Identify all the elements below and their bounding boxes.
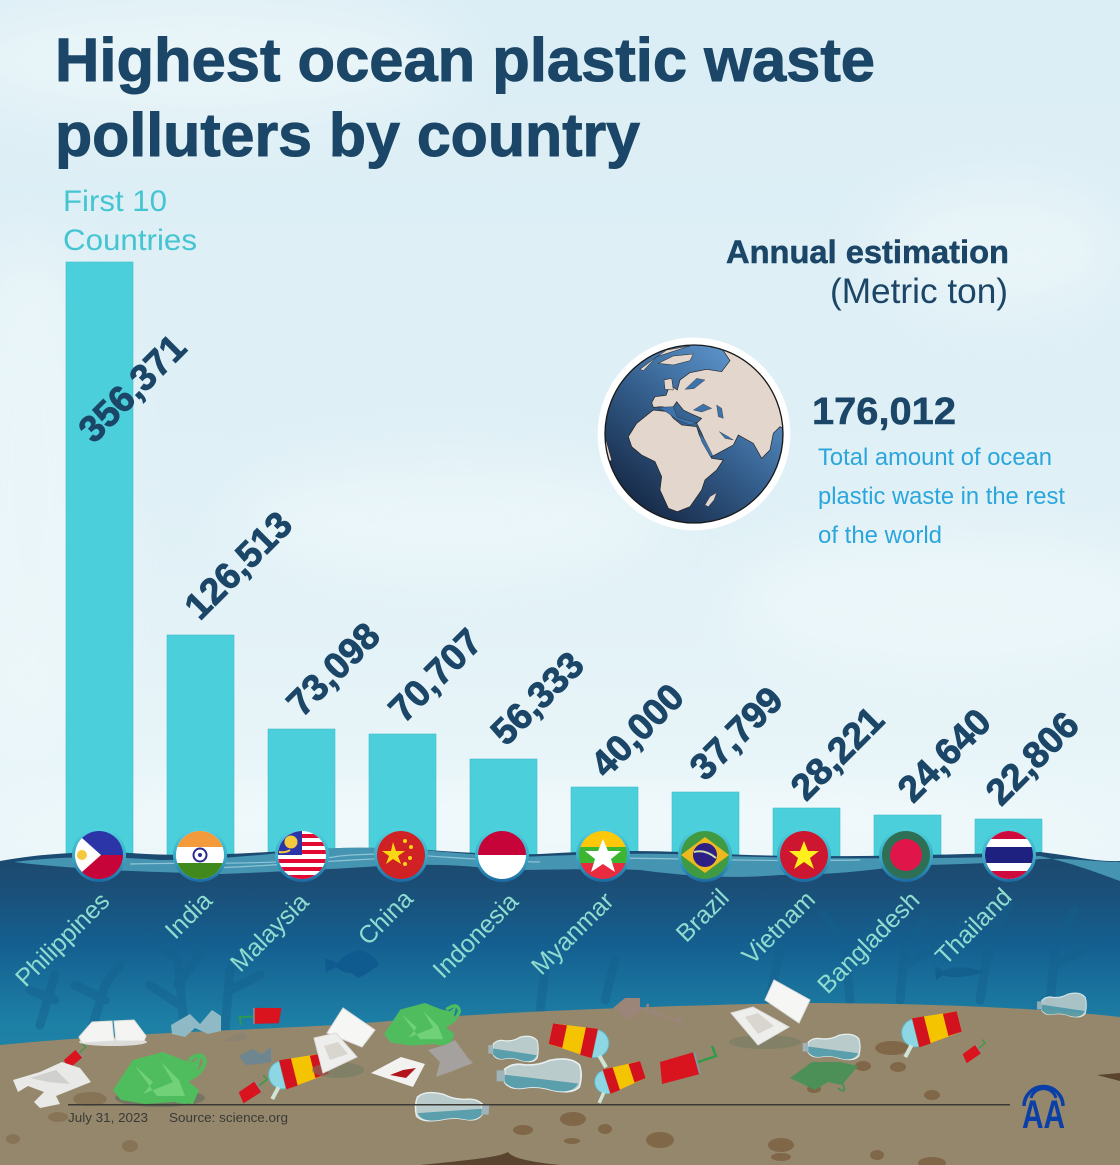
- mediterranean and inland seas: [658, 378, 733, 457]
- green bag centre: [384, 1003, 459, 1046]
- footer date and source: [68, 1110, 288, 1125]
- flag: Myanmar: [576, 828, 630, 882]
- annual estimation heading: [726, 234, 1009, 311]
- value labels: 40,000: [583, 676, 692, 785]
- total description: of the world: [818, 522, 942, 549]
- red cup big: [660, 1046, 716, 1084]
- sky background: [0, 0, 1120, 900]
- country labels: Indonesia: [427, 887, 524, 984]
- footer date and source: Source: science.org: [169, 1110, 288, 1125]
- flag: Vietnam: [777, 828, 831, 882]
- total description: Total amount of ocean: [818, 444, 1052, 471]
- small red cup left: [61, 1043, 91, 1069]
- seabed sand: [0, 1003, 1120, 1165]
- british isles and arctic land: [603, 346, 693, 463]
- bottle far right: [1037, 993, 1086, 1017]
- striped cup right: [897, 1007, 964, 1057]
- africa: [628, 410, 723, 512]
- red cup lower: [236, 1074, 272, 1104]
- fish bone small: [222, 1033, 246, 1042]
- value labels: 70,707: [381, 621, 490, 730]
- flag: Bangladesh: [879, 828, 933, 882]
- madagascar: [705, 493, 717, 507]
- small red cup right: [960, 1039, 990, 1064]
- grey plastic bag: [428, 1040, 473, 1077]
- title: [55, 26, 875, 169]
- AA logo: AA: [1022, 1093, 1065, 1137]
- striped cup upper: [546, 1019, 614, 1067]
- white plastic bag: [13, 1062, 91, 1108]
- total description: [818, 444, 1065, 549]
- footer divider: [68, 1104, 1010, 1106]
- bottle right: [803, 1034, 860, 1060]
- bar chart: [66, 262, 1042, 862]
- subtitle: first 10 countries: [63, 185, 197, 257]
- annual estimation heading: (Metric ton): [830, 272, 1008, 311]
- value labels: 73,098: [279, 615, 388, 724]
- green plastic bag: [113, 1052, 205, 1107]
- fish silhouette right: [935, 966, 983, 980]
- value labels: [71, 327, 1087, 813]
- sand spots: [6, 1041, 946, 1165]
- total description: plastic waste in the rest: [818, 483, 1065, 510]
- country labels: Brazil: [671, 884, 735, 948]
- red cup: [238, 998, 283, 1034]
- open foam box: [312, 1008, 375, 1078]
- striped cup lower: [590, 1058, 648, 1103]
- coral silhouettes: [30, 905, 1090, 1040]
- flag: Brazil: [678, 828, 732, 882]
- value labels: 22,806: [978, 704, 1087, 813]
- country labels: Bangladesh: [812, 886, 925, 999]
- title: polluters by country: [55, 101, 640, 169]
- flag: China: [374, 828, 428, 882]
- plastic waste litter: [13, 980, 1086, 1124]
- striped cup: [264, 1049, 331, 1099]
- closed foam box: [79, 1020, 147, 1046]
- value labels: 356,371: [71, 327, 194, 450]
- annual estimation heading: Annual estimation: [726, 234, 1009, 270]
- crushed grey bottle: [239, 1047, 271, 1065]
- bottle lower: [415, 1092, 490, 1124]
- country labels: Thailand: [930, 883, 1018, 971]
- subtitle: first 10 countries: First 10: [63, 185, 167, 218]
- country labels: [10, 883, 1018, 999]
- flag: Thailand: [982, 828, 1036, 882]
- foam box right: [729, 980, 810, 1049]
- country labels: Myanmar: [526, 887, 619, 980]
- country labels: China: [353, 885, 419, 951]
- flag: Philippines: [72, 828, 126, 882]
- ocean water: [0, 848, 1120, 1060]
- big bottle: [497, 1059, 581, 1092]
- footer date and source: July 31, 2023: [68, 1110, 148, 1125]
- dark green bag: [790, 1062, 858, 1091]
- crushed bottle top: [171, 1010, 221, 1037]
- country labels: India: [160, 887, 218, 945]
- value labels: 56,333: [483, 644, 592, 753]
- globe icon: [598, 338, 790, 530]
- value labels: 24,640: [890, 701, 999, 810]
- dark soil edge: [420, 1073, 1120, 1165]
- value labels: 37,799: [682, 679, 791, 788]
- fish silhouette left: [325, 951, 379, 978]
- bottle mid: [488, 1036, 538, 1062]
- eurasia: [652, 343, 787, 458]
- country labels: Malaysia: [225, 888, 315, 977]
- flag: Malaysia: [275, 828, 329, 882]
- country labels: Philippines: [10, 887, 115, 992]
- value labels: 28,221: [783, 699, 892, 808]
- flag: India: [173, 828, 227, 882]
- water surface band: [14, 848, 1120, 881]
- subtitle: first 10 countries: Countries: [63, 224, 197, 257]
- total number: 176,012: [812, 391, 956, 433]
- country labels: Vietnam: [737, 886, 821, 970]
- flag: Indonesia: [475, 828, 529, 882]
- takeout tray: [371, 1057, 425, 1087]
- fish bone: [613, 998, 683, 1029]
- title: Highest ocean plastic waste: [55, 26, 875, 94]
- value labels: 126,513: [177, 504, 300, 627]
- AA logo: [1022, 1086, 1065, 1137]
